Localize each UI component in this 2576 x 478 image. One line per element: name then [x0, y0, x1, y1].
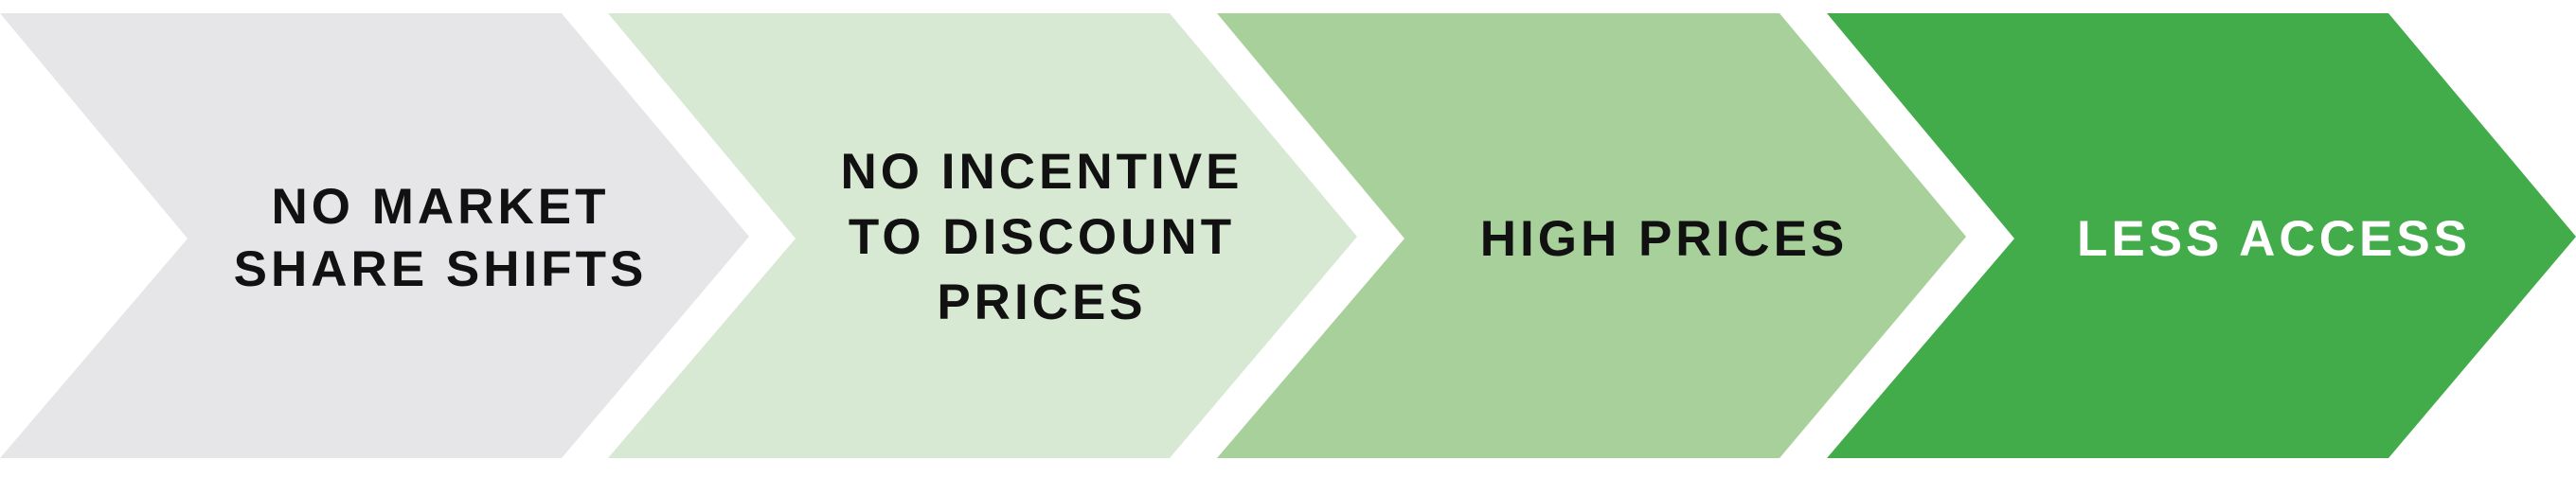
text: no incentive to discount prices: PRICES: [937, 274, 1147, 330]
text: less access: LESS ACCESS: [2077, 211, 2471, 267]
text: no incentive to discount prices: NO INCENTIVE: [841, 144, 1243, 200]
text: no market share shifts: NO MARKET: [272, 179, 609, 235]
text: high prices: HIGH PRICES: [1480, 211, 1848, 267]
text: no market share shifts: SHARE SHIFTS: [234, 241, 647, 297]
chevron: no market share shifts: [0, 13, 749, 458]
chevron: less access: [1827, 13, 2576, 458]
text: no incentive to discount prices: TO DISCOUNT: [849, 209, 1235, 265]
chevron: high prices: [1217, 13, 1966, 458]
chevron: no incentive to discount prices: [608, 13, 1357, 458]
